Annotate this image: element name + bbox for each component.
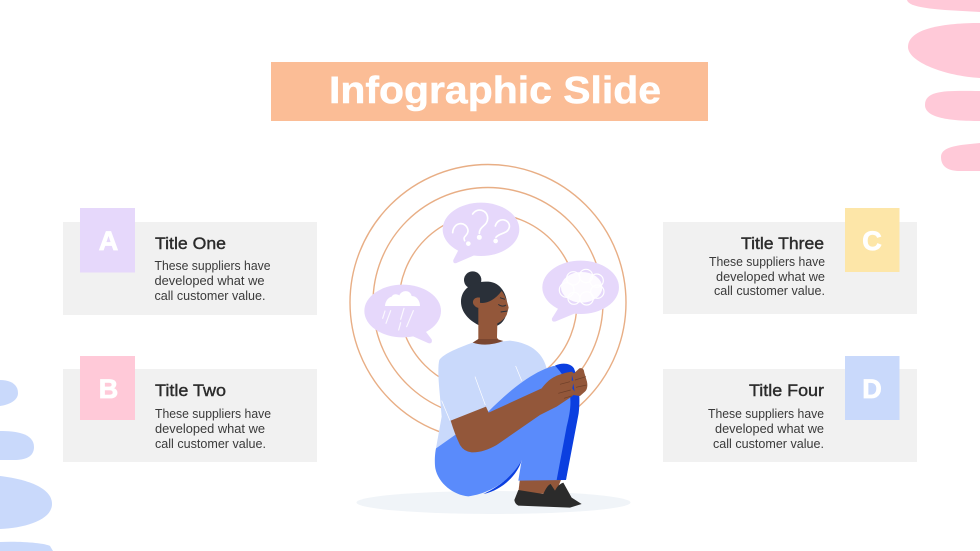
- neck and face: [475, 291, 509, 345]
- badge B: B: [99, 374, 118, 404]
- text: card C body: These suppliers have: [709, 254, 825, 269]
- text: card A body: These suppliers have: [154, 258, 270, 273]
- trousers: [435, 365, 578, 496]
- badge D: [845, 356, 900, 420]
- text: card B body: These suppliers have: [155, 406, 271, 421]
- badge C: C: [862, 226, 882, 256]
- decoration: blue blobs: [0, 380, 53, 551]
- t-shirt: [436, 341, 547, 448]
- hair: [461, 282, 507, 326]
- text: card D body: [708, 406, 824, 451]
- panel: card C: [663, 208, 917, 314]
- ankles: [518, 478, 562, 494]
- heading: Title Four: Title Four: [749, 381, 824, 400]
- arm and hand: [451, 368, 587, 452]
- head: [461, 271, 509, 345]
- heading: Title Two: Title Two: [155, 381, 226, 400]
- text: card B body: [155, 406, 271, 451]
- shoes: [514, 483, 582, 508]
- closed eye, brow and mouth: [498, 298, 507, 312]
- text: card C body: call customer value.: [714, 283, 825, 298]
- title banner: Infographic Slide: [329, 70, 661, 112]
- badge A: [80, 208, 135, 272]
- panel: card B: [63, 356, 317, 462]
- bun: [464, 271, 481, 289]
- badge D: D: [862, 374, 882, 404]
- shirt folds: [442, 366, 522, 421]
- heading: Title Three: Title Three: [741, 234, 824, 253]
- text: card C body: developed what we: [716, 269, 825, 284]
- speech bubble: tangled thoughts: [542, 261, 619, 322]
- speech bubble: rain cloud: [364, 285, 441, 343]
- text: card D body: developed what we: [715, 421, 824, 436]
- text: card B body: call customer value.: [155, 436, 266, 451]
- badge C: [845, 208, 900, 272]
- text: card A body: [154, 258, 270, 303]
- text: card C body: [709, 254, 825, 298]
- trouser shadow stripe: [483, 364, 579, 494]
- text: card D body: These suppliers have: [708, 406, 824, 421]
- text: card A body: developed what we: [154, 273, 264, 288]
- collar: [473, 339, 503, 345]
- decoration: pink blobs: [907, 0, 980, 171]
- person body: [435, 339, 587, 508]
- badge B: [80, 356, 135, 420]
- badge A: A: [99, 226, 118, 256]
- concentric rings: [350, 164, 626, 440]
- ear: [473, 297, 480, 308]
- finger lines: [558, 377, 587, 398]
- text: card A body: call customer value.: [154, 288, 266, 303]
- panel: card A: [63, 208, 317, 315]
- floor shadow: [356, 491, 630, 514]
- title banner: [271, 62, 708, 121]
- blue gap between hands: [572, 375, 575, 392]
- speech bubble: question marks: [443, 203, 519, 263]
- text: card D body: call customer value.: [713, 436, 824, 451]
- panel: card D: [663, 356, 917, 462]
- heading: Title One: Title One: [155, 234, 226, 253]
- text: card B body: developed what we: [155, 421, 265, 436]
